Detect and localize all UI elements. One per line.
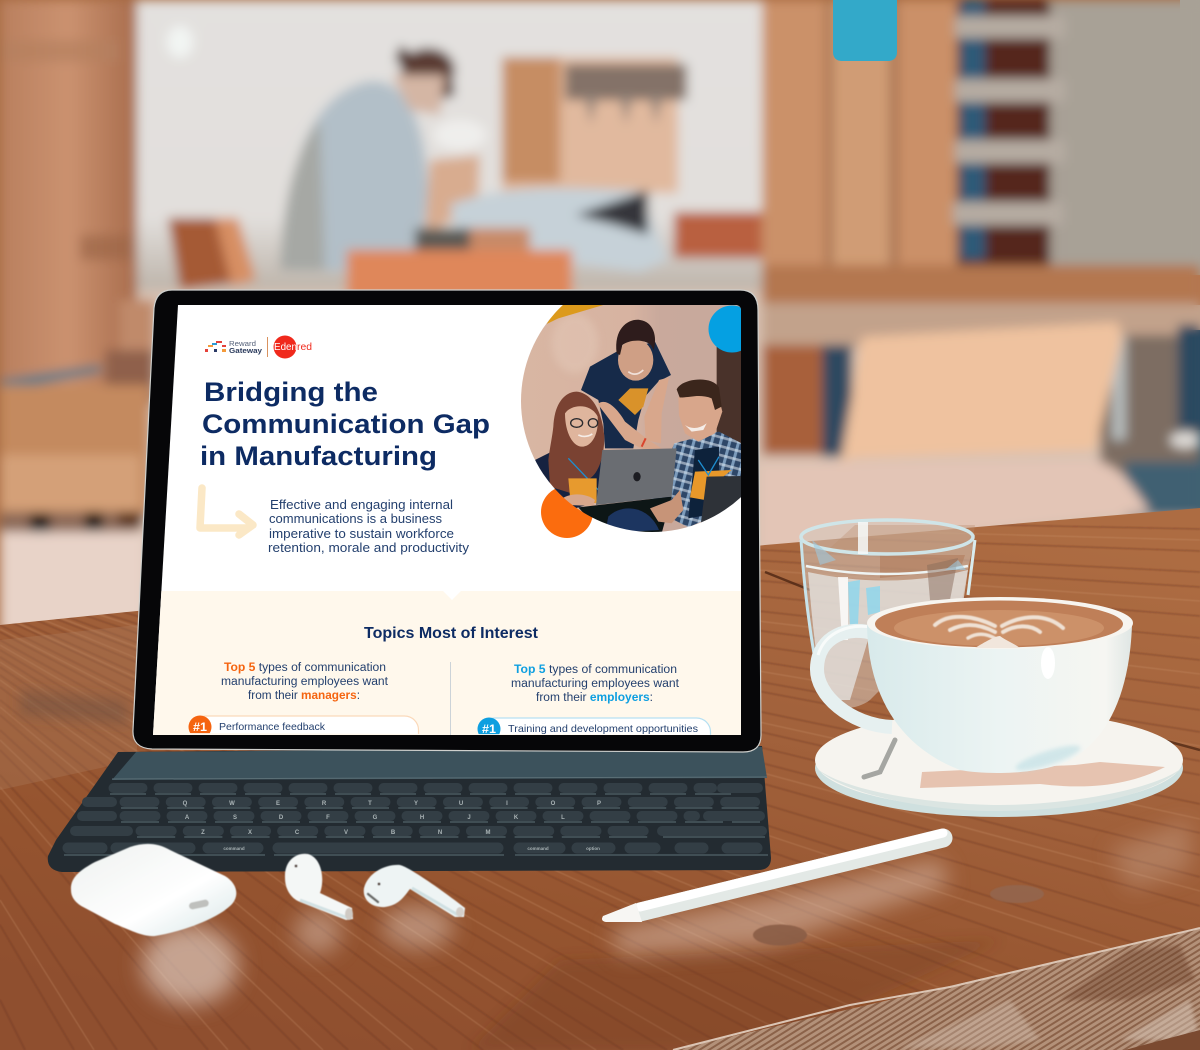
coffee	[875, 600, 1123, 648]
wooden table top	[0, 505, 1200, 1050]
person in background	[168, 218, 255, 290]
logos: red	[297, 341, 312, 353]
wood grain	[0, 505, 1200, 1050]
tablet screen	[150, 300, 756, 758]
keyboard legends: N	[438, 830, 442, 836]
logos: Eden	[274, 341, 297, 353]
airpods case	[71, 844, 236, 936]
tablet	[133, 290, 761, 758]
keyboard legends: V	[344, 830, 348, 836]
title: in Manufacturing	[200, 441, 437, 471]
cup handle	[817, 631, 892, 727]
keyboard legends: I	[506, 801, 508, 807]
table reflections	[142, 820, 1190, 1005]
keyboard legends: C	[295, 830, 300, 836]
intro text: retention, morale and productivity	[268, 541, 470, 555]
decorative blue blob	[708, 306, 741, 352]
laptop in photo	[596, 448, 677, 505]
intro text	[268, 498, 470, 555]
left airpod	[285, 854, 353, 920]
column: managers: Top 5 types of communication	[224, 662, 386, 674]
column: managers	[221, 662, 389, 702]
keyboard legends: P	[597, 801, 601, 807]
right wooden wall	[762, 0, 828, 280]
right man	[648, 432, 742, 527]
column: employers: manufacturing employees want	[511, 678, 680, 690]
right edge backing strip	[1180, 0, 1200, 520]
pill: training and development: Training and development opportunities	[508, 723, 698, 735]
pill: training and development: #1	[482, 724, 497, 736]
keyboard legends: K	[514, 815, 519, 821]
column: managers: from their managers:	[248, 690, 360, 702]
pill: performance feedback: Performance feedback	[219, 721, 326, 733]
case connector	[188, 899, 209, 910]
sachet	[920, 762, 1165, 788]
topics heading: Topics Most of Interest	[364, 625, 538, 642]
keyboard keys	[64, 788, 768, 855]
keyboard legends: A	[185, 815, 190, 821]
woman	[535, 452, 602, 508]
keyboard legends: G	[373, 815, 378, 821]
column: employers: Top 5 types of communication	[514, 664, 677, 676]
column: employers	[511, 664, 680, 704]
intro text: imperative to sustain workforce	[269, 527, 454, 541]
spoon	[864, 740, 895, 777]
keyboard legends	[183, 801, 601, 851]
pill: performance feedback: #1	[193, 722, 208, 734]
keyboard	[48, 746, 771, 872]
logos: Reward	[229, 341, 256, 348]
tablet body	[133, 290, 761, 752]
standing man	[581, 342, 671, 448]
decorative orange circle	[541, 486, 593, 538]
coffee cup	[817, 597, 1133, 775]
shelf board behind	[502, 57, 678, 193]
keyboard legends: R	[322, 801, 327, 807]
right airpod	[364, 865, 465, 917]
keyboard legends: E	[276, 801, 280, 807]
title: Bridging the	[204, 377, 378, 407]
keyboard legends: Q	[183, 801, 188, 807]
edenred mark	[274, 336, 296, 358]
keyboard legends: F	[326, 815, 330, 821]
glass of water	[800, 520, 975, 708]
keyboard legends: command	[527, 846, 549, 851]
keyboard legends: command	[223, 846, 245, 851]
keyboard legends: T	[368, 801, 372, 807]
keyboard legends: B	[391, 830, 396, 836]
latte art	[935, 617, 1063, 639]
wood knots	[753, 885, 1044, 946]
column: employers: from their employers:	[536, 692, 653, 704]
intro text: communications is a business	[269, 512, 442, 526]
keyboard legends: X	[248, 830, 252, 836]
keyboard legends: W	[229, 801, 235, 807]
panel: topics most of interest	[153, 591, 741, 735]
keyboard legends: Z	[201, 830, 205, 836]
keyboard legends: U	[459, 801, 463, 807]
keyboard legends: J	[467, 815, 471, 821]
keyboard legends: Y	[414, 801, 418, 807]
title	[200, 377, 490, 471]
cup body	[867, 625, 1132, 773]
reward gateway mark	[205, 341, 226, 352]
cup rim	[867, 597, 1133, 649]
keyboard legends: S	[233, 815, 237, 821]
icon: arrow	[200, 488, 253, 535]
saucer	[815, 711, 1183, 817]
pill: training and development	[478, 717, 712, 735]
logos: Gateway	[229, 348, 262, 355]
keyboard legends: option	[586, 846, 600, 851]
logos	[205, 336, 312, 358]
keyboard legends: H	[420, 815, 424, 821]
rough table edge	[673, 928, 1200, 1050]
blurred cafe background	[0, 0, 1200, 640]
keyboard legends: M	[486, 830, 490, 836]
apple pencil	[602, 833, 943, 922]
keyboard legends: D	[279, 815, 284, 821]
column: managers: manufacturing employees want	[221, 676, 389, 688]
hero photo	[515, 300, 745, 540]
keyboard legends: O	[551, 801, 556, 807]
title: Communication Gap	[202, 409, 490, 439]
blue panel on wall	[833, 0, 897, 61]
pill: performance feedback	[188, 715, 420, 734]
keyboard legends: L	[561, 815, 565, 821]
intro text: Effective and engaging internal	[270, 498, 453, 512]
